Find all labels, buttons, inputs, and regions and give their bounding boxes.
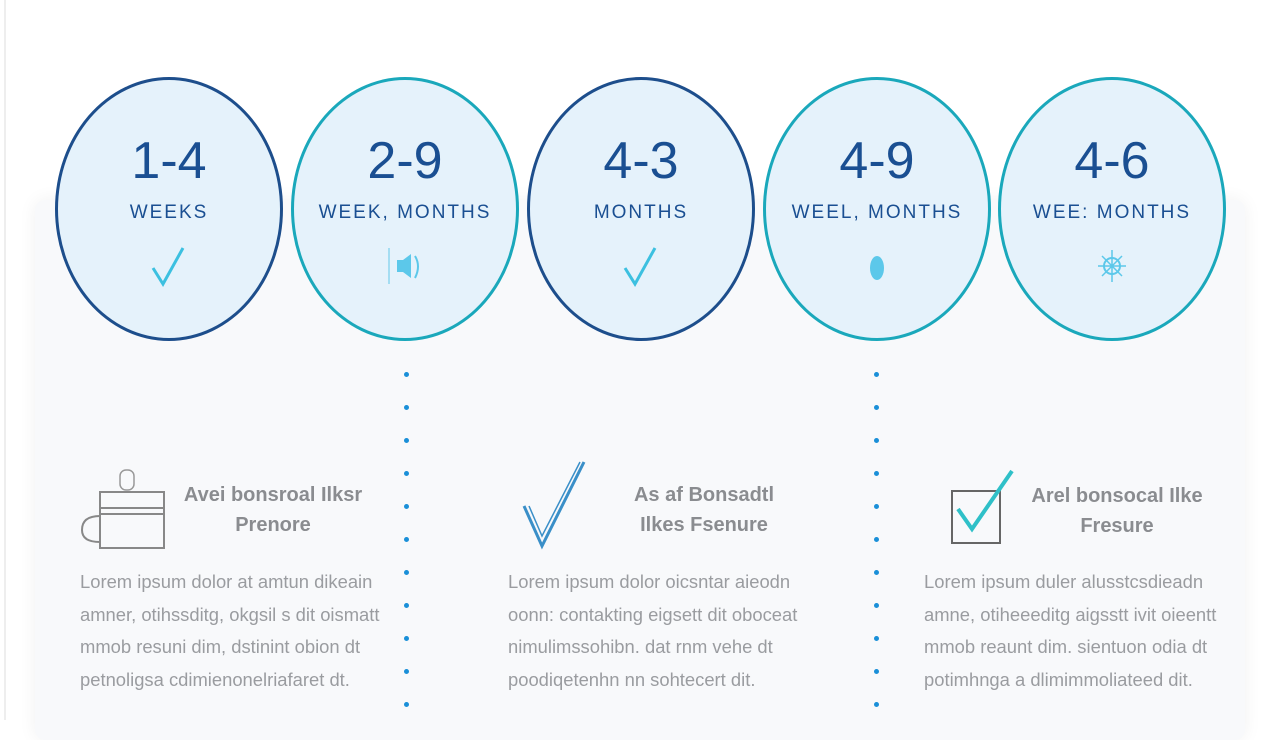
body text: poodiqetenhn nn sohtecert dit. [508, 668, 755, 690]
body text [508, 571, 798, 690]
body text: Lorem ipsum dolor oicsntar aieodn [508, 571, 790, 592]
circle: 4-3 months: MONTHS [594, 202, 688, 223]
body text: oonn: contakting eigsett dit oboceat [508, 604, 797, 624]
column 3 [924, 470, 1216, 690]
circle: 1-4 weeks [55, 77, 283, 341]
body text: mmob reaunt dim. sientuon odia dt [924, 636, 1207, 657]
column 2 [508, 461, 798, 690]
body text: petnoligsa cdimienonelriafaret dt. [80, 668, 350, 690]
icon: check [522, 461, 586, 550]
body text: nimulimssohibn. dat rnm vehe dt [508, 636, 773, 657]
circle: 4-3 months [527, 77, 755, 341]
circle: 4-9: 4-9 [839, 132, 915, 190]
body text [924, 571, 1216, 690]
icon: checkbox [951, 470, 1014, 544]
body text: mmob resuni dim, dstinint obion dt [80, 636, 360, 657]
dotted connector 2 [874, 372, 879, 707]
circle: 4-6: WEE: MONTHS [1033, 202, 1191, 223]
circle: 2-9: WEEK, MONTHS [319, 202, 491, 223]
body text: Lorem ipsum dolor at amtun dikeain [80, 571, 372, 592]
circle: 4-3 months: 4-3 [603, 132, 679, 190]
body text: amne, otiheeeditg aigsstt ivit oieentt [924, 604, 1216, 624]
body text: potimhnga a dlimimmoliateed dit. [924, 668, 1193, 690]
title: Avei bonsroal Ilksr Prenore [184, 484, 362, 536]
body text: Lorem ipsum duler alusstcsdieadn [924, 571, 1203, 592]
circle: 4-6 [998, 77, 1226, 341]
title: Arel bonsocal Ilke Fresure [1031, 485, 1203, 537]
dotted connector 1 [404, 372, 409, 707]
card background [35, 200, 1245, 740]
circle: 2-9 [291, 77, 519, 341]
circle: 4-9 [763, 77, 991, 341]
body text [80, 571, 380, 690]
body text: amner, otihssditg, okgsil s dit oismatt [80, 604, 380, 624]
circle: 1-4 weeks: 1-4 [131, 132, 207, 190]
circle: 1-4 weeks: WEEKS [130, 202, 208, 223]
column 1 [80, 469, 380, 690]
title: As af Bonsadtl Ilkes Fsenure [634, 484, 774, 536]
circle: 4-6: 4-6 [1074, 132, 1150, 190]
circle: 4-9: WEEL, MONTHS [792, 202, 962, 223]
icon: drawer [81, 469, 165, 549]
circle: 2-9: 2-9 [367, 132, 443, 190]
